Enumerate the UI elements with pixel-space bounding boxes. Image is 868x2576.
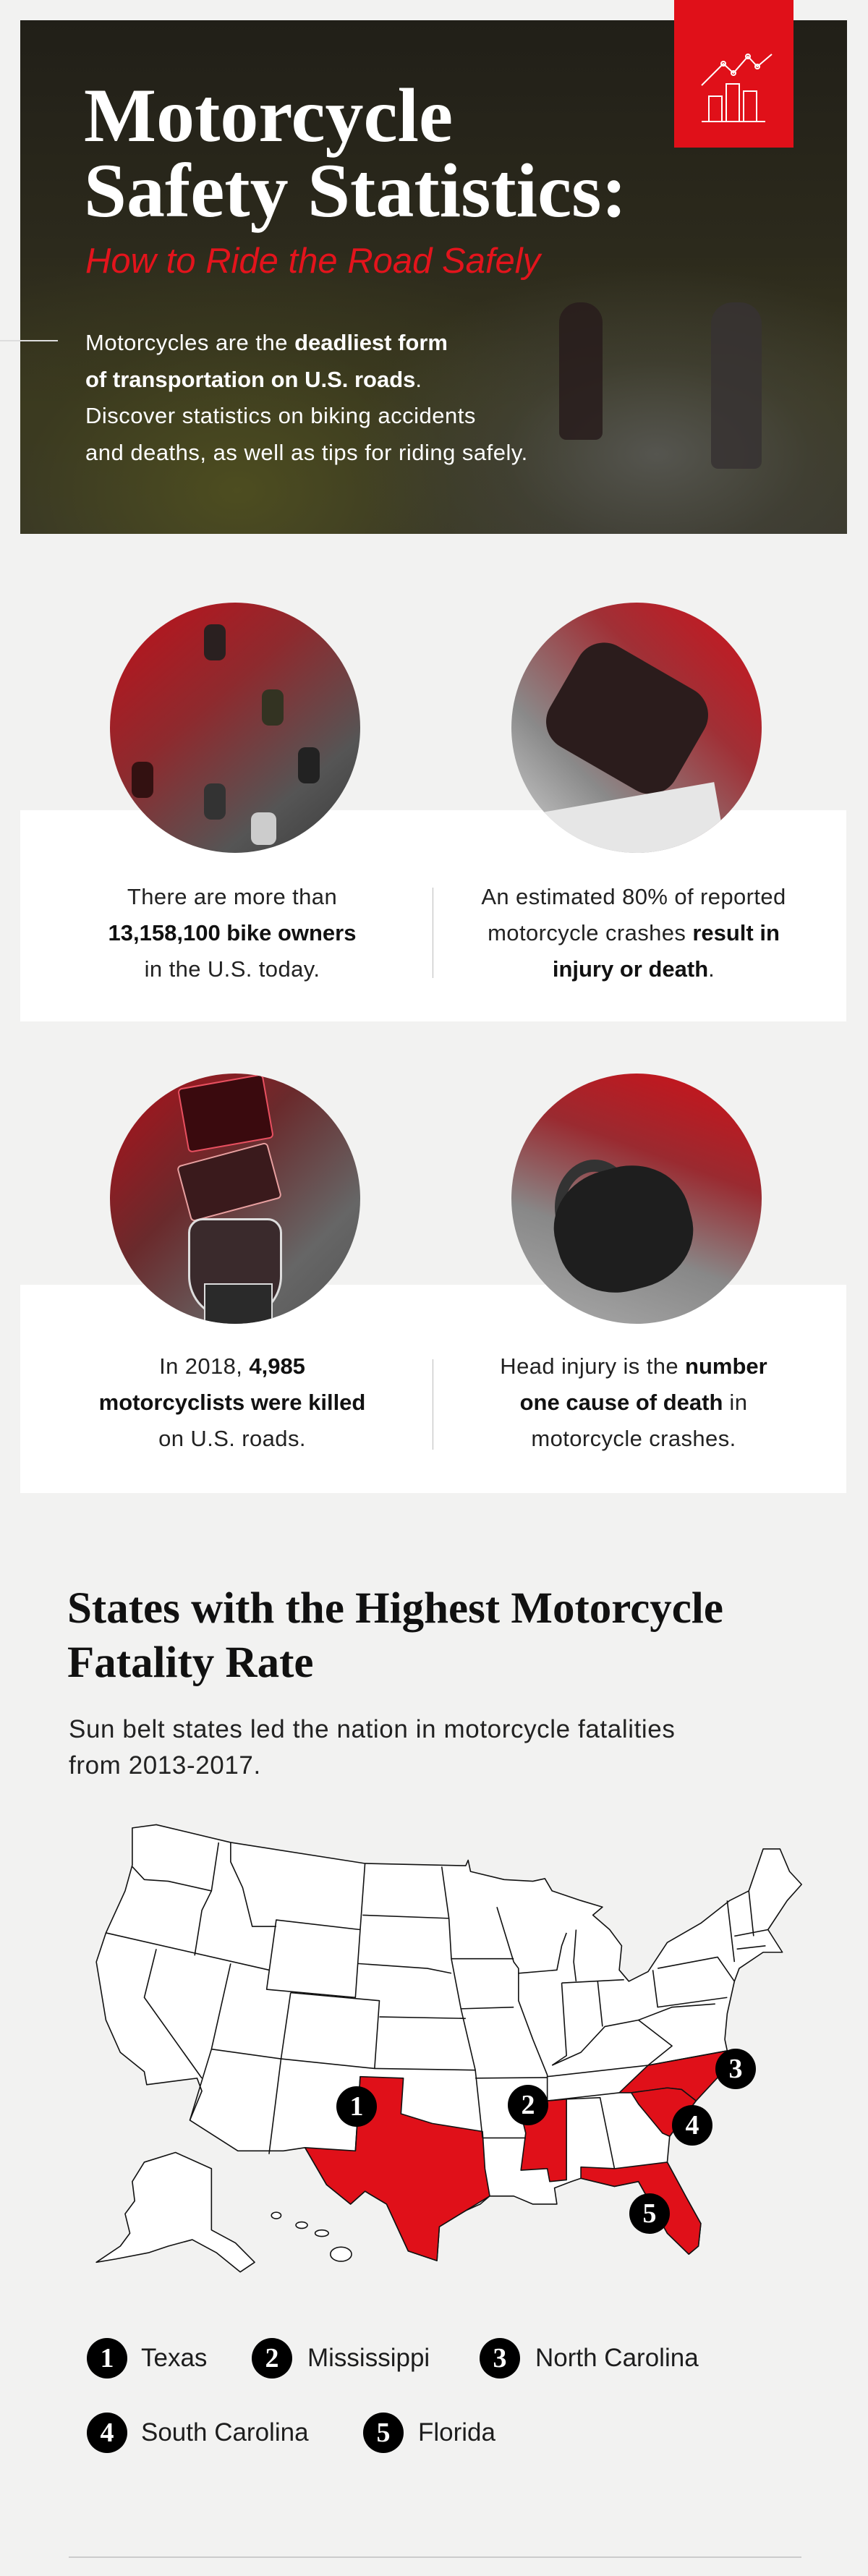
stat: killed 2018 [99, 1353, 365, 1451]
marker 3: 3 [729, 2054, 742, 2084]
Hawaii [271, 2212, 281, 2219]
legend: South Carolina [87, 2413, 127, 2453]
map: US states [95, 1824, 802, 2273]
stat: bike owners: in the U.S. today. [145, 956, 320, 982]
stat: crash injuries [481, 884, 786, 982]
marker 5: 5 [642, 2198, 657, 2229]
legend: Mississippi: 2 [265, 2343, 279, 2373]
stat: killed 2018: on U.S. roads. [158, 1426, 306, 1451]
legend: North Carolina: 3 [493, 2343, 506, 2373]
legend: Florida: 5 [376, 2418, 391, 2448]
hero paragraph: and deaths, as well as tips for riding safely. [85, 440, 528, 464]
stat: crash injuries: injury or death. [553, 956, 715, 982]
stat: head injury [500, 1353, 767, 1451]
section subtext: Sun belt states led the nation in motorcycle fatalities [69, 1715, 675, 1743]
title [84, 73, 627, 233]
section heading [67, 1584, 723, 1687]
motorcyclist 2 [711, 302, 762, 469]
legend: Texas [87, 2338, 127, 2379]
panel: stats row 1 [20, 810, 846, 1021]
subtitle: How to Ride the Road Safely [85, 242, 540, 281]
marker 4: 4 [686, 2110, 699, 2141]
section heading: Fatality Rate [67, 1638, 313, 1687]
hero paragraph: Discover statistics on biking accidents [85, 403, 476, 428]
marker 1 [336, 2086, 377, 2127]
title: Safety Statistics: [84, 148, 627, 233]
marker 5 [629, 2193, 670, 2234]
stat: head injury: motorcycle crashes. [531, 1426, 736, 1451]
stat: bike owners: 13,158,100 bike owners [109, 920, 356, 945]
stat: head injury: one cause of death in [520, 1390, 747, 1415]
marker 2: 2 [521, 2090, 535, 2120]
marker 3 [715, 2049, 756, 2089]
legend: North Carolina [480, 2338, 520, 2379]
image circle: motorcycles from above [110, 603, 360, 853]
image circle: interstate 95 sign [110, 1074, 360, 1324]
stat: bike owners [109, 884, 356, 982]
hero panel [20, 20, 847, 534]
legend: Texas [141, 2344, 207, 2372]
legend: Florida [418, 2418, 495, 2447]
stat: killed 2018: In 2018, 4,985 [159, 1353, 305, 1379]
title: Motorcycle [84, 73, 453, 158]
icon box: chart [674, 0, 793, 148]
stat: head injury: Head injury is the number [500, 1353, 767, 1379]
section heading: States with the Highest Motorcycle [67, 1584, 723, 1633]
stat: crash injuries: An estimated 80% of reported [481, 884, 786, 909]
hero paragraph: Motorcycles are the deadliest form [85, 330, 448, 355]
hero paragraph [85, 330, 528, 464]
panel: stats row 2 [20, 1285, 846, 1493]
bottom rule [69, 2556, 801, 2558]
hero side line [0, 340, 58, 341]
section subtext: from 2013-2017. [69, 1751, 261, 1780]
legend: South Carolina: 4 [100, 2418, 114, 2448]
legend: Mississippi [252, 2338, 292, 2379]
stat: bike owners: There are more than [127, 884, 337, 909]
marker 1: 1 [350, 2091, 363, 2122]
legend: Texas: 1 [100, 2343, 114, 2373]
image circle: knee brace [511, 603, 762, 853]
hero paragraph: of transportation on U.S. roads. [85, 366, 422, 392]
Alaska [96, 2153, 255, 2272]
legend: North Carolina [535, 2344, 699, 2372]
image circle: helmet [511, 1074, 762, 1324]
marker 4 [672, 2105, 712, 2146]
motorcyclist 1 [559, 302, 603, 440]
stat: crash injuries: motorcycle crashes result in [488, 920, 780, 945]
section subtext [69, 1715, 675, 1780]
legend [87, 2338, 699, 2453]
legend: Florida [363, 2413, 404, 2453]
stat: killed 2018: motorcyclists were killed [99, 1390, 365, 1415]
legend: South Carolina [141, 2418, 309, 2447]
red states [305, 2077, 490, 2261]
marker 2 [508, 2085, 548, 2125]
legend: Mississippi [307, 2344, 430, 2372]
